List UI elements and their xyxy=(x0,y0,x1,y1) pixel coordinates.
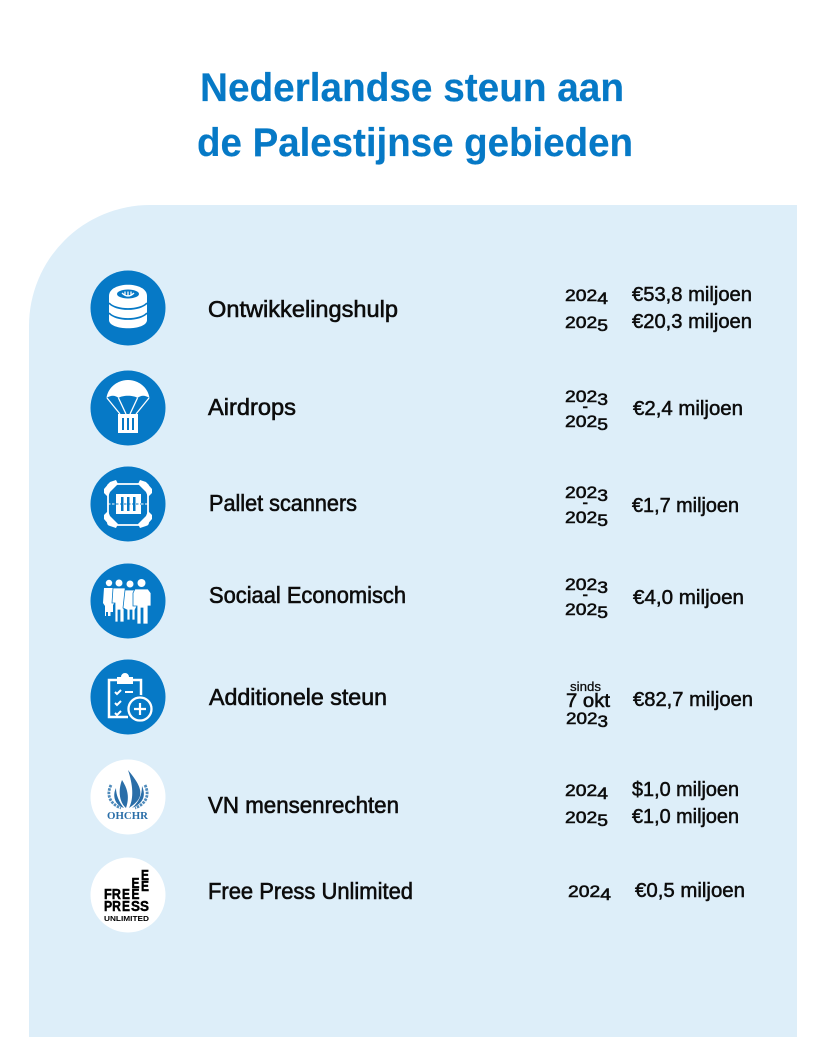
amounts xyxy=(632,779,739,828)
label: Ontwikkelingshulp xyxy=(208,296,398,322)
amount: €2,4 miljoen xyxy=(633,398,743,420)
years xyxy=(565,782,608,830)
icon: OHCHR logo xyxy=(90,760,166,834)
icon: Free Press Unlimited logo: E xyxy=(122,887,130,903)
years: 202 xyxy=(565,287,593,305)
years: 4 xyxy=(597,785,608,803)
amount: €0,5 miljoen xyxy=(635,880,745,902)
years: 4 xyxy=(597,290,608,308)
row: Sociaal Economisch xyxy=(90,564,744,638)
label: Additionele steun xyxy=(209,684,387,710)
years: - xyxy=(582,494,588,512)
years: 5 xyxy=(597,416,608,434)
years: 3 xyxy=(597,391,608,409)
icon: Free Press Unlimited logo xyxy=(90,858,166,932)
icon: coin stack xyxy=(90,270,166,346)
amounts: €53,8 miljoen xyxy=(632,284,752,306)
row: VN mensenrechten xyxy=(90,760,739,834)
amounts: €20,3 miljoen xyxy=(632,311,752,333)
amount: €82,7 miljoen xyxy=(633,689,753,711)
label: Sociaal Economisch xyxy=(209,582,406,608)
title: Nederlandse steun aan xyxy=(200,66,624,110)
icon: Free Press Unlimited logo: E xyxy=(141,868,149,884)
years: 202 xyxy=(565,484,593,502)
years: 202 xyxy=(565,782,593,800)
row: Additionele steun xyxy=(90,660,753,734)
amounts xyxy=(632,284,752,333)
title xyxy=(197,66,633,165)
years: - xyxy=(582,586,588,604)
icon: Free Press Unlimited logo: E xyxy=(132,876,140,892)
years: 202 xyxy=(565,576,593,594)
years: 5 xyxy=(597,317,608,335)
period: 202 xyxy=(566,710,594,728)
icon: Free Press Unlimited logo: E xyxy=(141,879,149,895)
years xyxy=(565,388,608,434)
years: 202 xyxy=(565,314,593,332)
icon: group of people xyxy=(90,564,166,638)
period xyxy=(566,680,611,731)
row: Pallet scanners xyxy=(90,466,739,542)
period: sinds xyxy=(570,680,601,694)
icon: Free Press Unlimited logo: SS xyxy=(131,899,149,915)
years: 5 xyxy=(597,512,608,530)
row: Free Press Unlimited xyxy=(90,858,745,932)
label: Free Press Unlimited xyxy=(208,878,413,904)
years: 5 xyxy=(597,604,608,622)
row: Ontwikkelingshulp xyxy=(90,270,752,346)
logo wordmark: OHCHR xyxy=(107,811,148,822)
icon: pallet scanner xyxy=(90,466,166,542)
years: 202 xyxy=(565,509,593,527)
amounts: $1,0 miljoen xyxy=(632,779,739,801)
background panel xyxy=(29,205,797,1037)
years xyxy=(565,576,608,622)
period: 7 okt xyxy=(566,691,611,712)
icon: Free Press Unlimited logo: PR xyxy=(104,899,121,915)
years xyxy=(565,287,608,335)
label: Airdrops xyxy=(208,394,296,420)
icon: Free Press Unlimited logo: E xyxy=(122,899,130,915)
years: - xyxy=(582,398,588,416)
label: VN mensenrechten xyxy=(208,792,399,818)
years: 202 xyxy=(565,413,593,431)
icon: parachute with crate xyxy=(90,370,166,446)
amount: €1,7 miljoen xyxy=(632,495,739,517)
title: de Palestijnse gebieden xyxy=(197,121,633,165)
year: 4 xyxy=(600,886,611,904)
amounts: €1,0 miljoen xyxy=(632,806,739,828)
years xyxy=(565,484,608,530)
year: 202 xyxy=(568,883,596,901)
icon: Free Press Unlimited logo: UNLIMITED xyxy=(104,914,150,923)
icon: Free Press Unlimited logo: FR xyxy=(104,887,121,903)
row: Airdrops xyxy=(90,370,743,446)
years: 3 xyxy=(597,579,608,597)
amount: €4,0 miljoen xyxy=(633,587,744,609)
icon: Free Press Unlimited logo: E xyxy=(132,887,140,903)
years: 202 xyxy=(565,809,593,827)
years: 202 xyxy=(565,601,593,619)
years: 5 xyxy=(597,812,608,830)
years: 202 xyxy=(565,388,593,406)
period: 3 xyxy=(597,713,608,731)
years: 3 xyxy=(597,487,608,505)
icon: clipboard with plus xyxy=(90,660,166,734)
label: Pallet scanners xyxy=(209,490,357,516)
